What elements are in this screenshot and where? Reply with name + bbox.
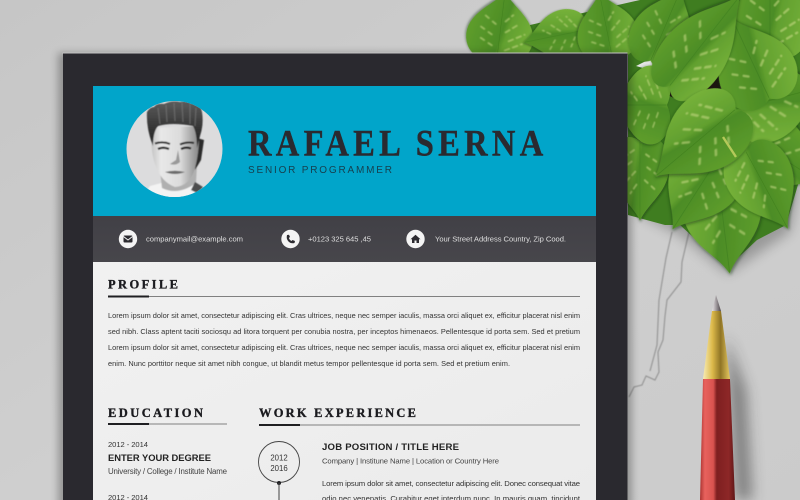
- pen shadow: [726, 335, 752, 500]
- hair strands: [158, 103, 196, 126]
- profile text: [108, 311, 580, 368]
- leaf lower middle: [642, 129, 755, 249]
- profile text: sed nibh. Class aptent taciti sociosqu ad litora torquent per conubia nostra, per inceptos himenaeos. Pellentesque id porta sem. Sed et pretium: [108, 327, 580, 336]
- leaf top centre: [569, 0, 642, 64]
- collar shadow: [191, 182, 203, 193]
- icon: envelope: [119, 230, 137, 248]
- company line: Company | Institune Name | Location or Country Here: [322, 456, 499, 466]
- leaf lower left: [610, 137, 670, 221]
- wall cracks: [629, 232, 689, 397]
- profile text: Lorem ipsum dolor sit amet, consectetur adipiscing elit. Cras ultrices, neque nec semper iaculis, massa orci aliquet ex, efficitur placerat nisl enim: [108, 311, 580, 320]
- education section: [108, 406, 228, 500]
- pen tip: [712, 295, 721, 311]
- leaf right edge: [719, 47, 800, 150]
- plant pot rim: [636, 58, 662, 70]
- profile rule: [108, 296, 580, 298]
- timeline marker: [258, 442, 300, 500]
- leaf bottom: [678, 170, 769, 278]
- portrait photo: [126, 100, 223, 200]
- leaf upper right: [696, 2, 800, 120]
- work heading: WORK EXPERIENCE: [259, 406, 416, 420]
- institute: University / College / Institute Name: [108, 467, 228, 476]
- leaf lower right: [714, 131, 800, 245]
- job description: [322, 479, 581, 500]
- phone number: +0123 325 645 ,45: [308, 234, 371, 244]
- job title: JOB POSITION / TITLE HERE: [322, 442, 460, 453]
- header band: [93, 86, 596, 216]
- profile text: enim. Nunc porttitor neque sit amet nibh congue, ut blandit metus tempor pellentesque id porta sem. Sed et pretium enim.: [108, 359, 510, 368]
- plant shadow: [470, 30, 800, 274]
- timeline marker: 2012: [270, 454, 288, 462]
- eyes: [158, 148, 191, 149]
- leaf large upper: [640, 0, 767, 112]
- profile section: [108, 278, 580, 368]
- plant soil: [657, 54, 733, 102]
- profile heading: PROFILE: [108, 278, 178, 292]
- timeline marker: 2016: [270, 464, 288, 473]
- leaf right lower edge: [723, 103, 800, 213]
- face: [151, 126, 199, 187]
- pen red barrel: [700, 379, 735, 500]
- work rule: [259, 424, 580, 426]
- eyebrows: [155, 142, 194, 144]
- ear shade: [195, 138, 204, 170]
- icon: phone: [281, 230, 300, 248]
- email: companymail@example.com: [146, 234, 243, 244]
- neck: [160, 165, 197, 191]
- plant: [463, 0, 800, 278]
- mouth: [165, 171, 185, 174]
- profile text: Lorem ipsum dolor sit amet, consectetur adipiscing elit. Cras ultrices, neque nec semper iaculis, massa orci aliquet ex, efficitur placerat nisl enim: [108, 343, 580, 352]
- name: RAFAEL SERNA: [248, 123, 543, 164]
- resume frame shadow: [58, 53, 632, 500]
- degree: ENTER YOUR DEGREE: [108, 452, 211, 463]
- sheet top edge: [62, 52, 628, 54]
- leaf centre: [631, 76, 765, 206]
- address: Your Street Address Country, Zip Cood.: [435, 234, 566, 244]
- leaf top left: [463, 0, 538, 65]
- job title: SENIOR PROGRAMMER: [248, 165, 392, 176]
- leaf top middle: [519, 5, 592, 67]
- pen gold cone: [703, 311, 730, 379]
- photo background: [126, 100, 223, 197]
- icon: home: [406, 230, 425, 248]
- education dates: 2012 - 2014: [108, 440, 148, 449]
- education rule: [108, 423, 227, 425]
- nose: [170, 150, 180, 165]
- shirt: [148, 183, 200, 197]
- resume sheet: [62, 52, 628, 500]
- job description: Lorem ipsum dolor sit amet, consectetur adipiscing elit. Donec consequat vitae: [322, 479, 580, 488]
- dark frame: [63, 54, 628, 500]
- plant dark base foliage: [528, 0, 800, 268]
- leaf upper round: [621, 0, 710, 77]
- education heading: EDUCATION: [108, 406, 203, 420]
- contact bar background: [93, 216, 596, 262]
- work experience section: [258, 406, 581, 500]
- contact bar: [93, 216, 596, 262]
- leaf top right corner: [731, 0, 800, 58]
- pen: [700, 295, 752, 500]
- leaf stem: [723, 137, 736, 157]
- hair: [147, 101, 203, 148]
- paper body: [93, 262, 596, 500]
- leaf left: [612, 66, 670, 144]
